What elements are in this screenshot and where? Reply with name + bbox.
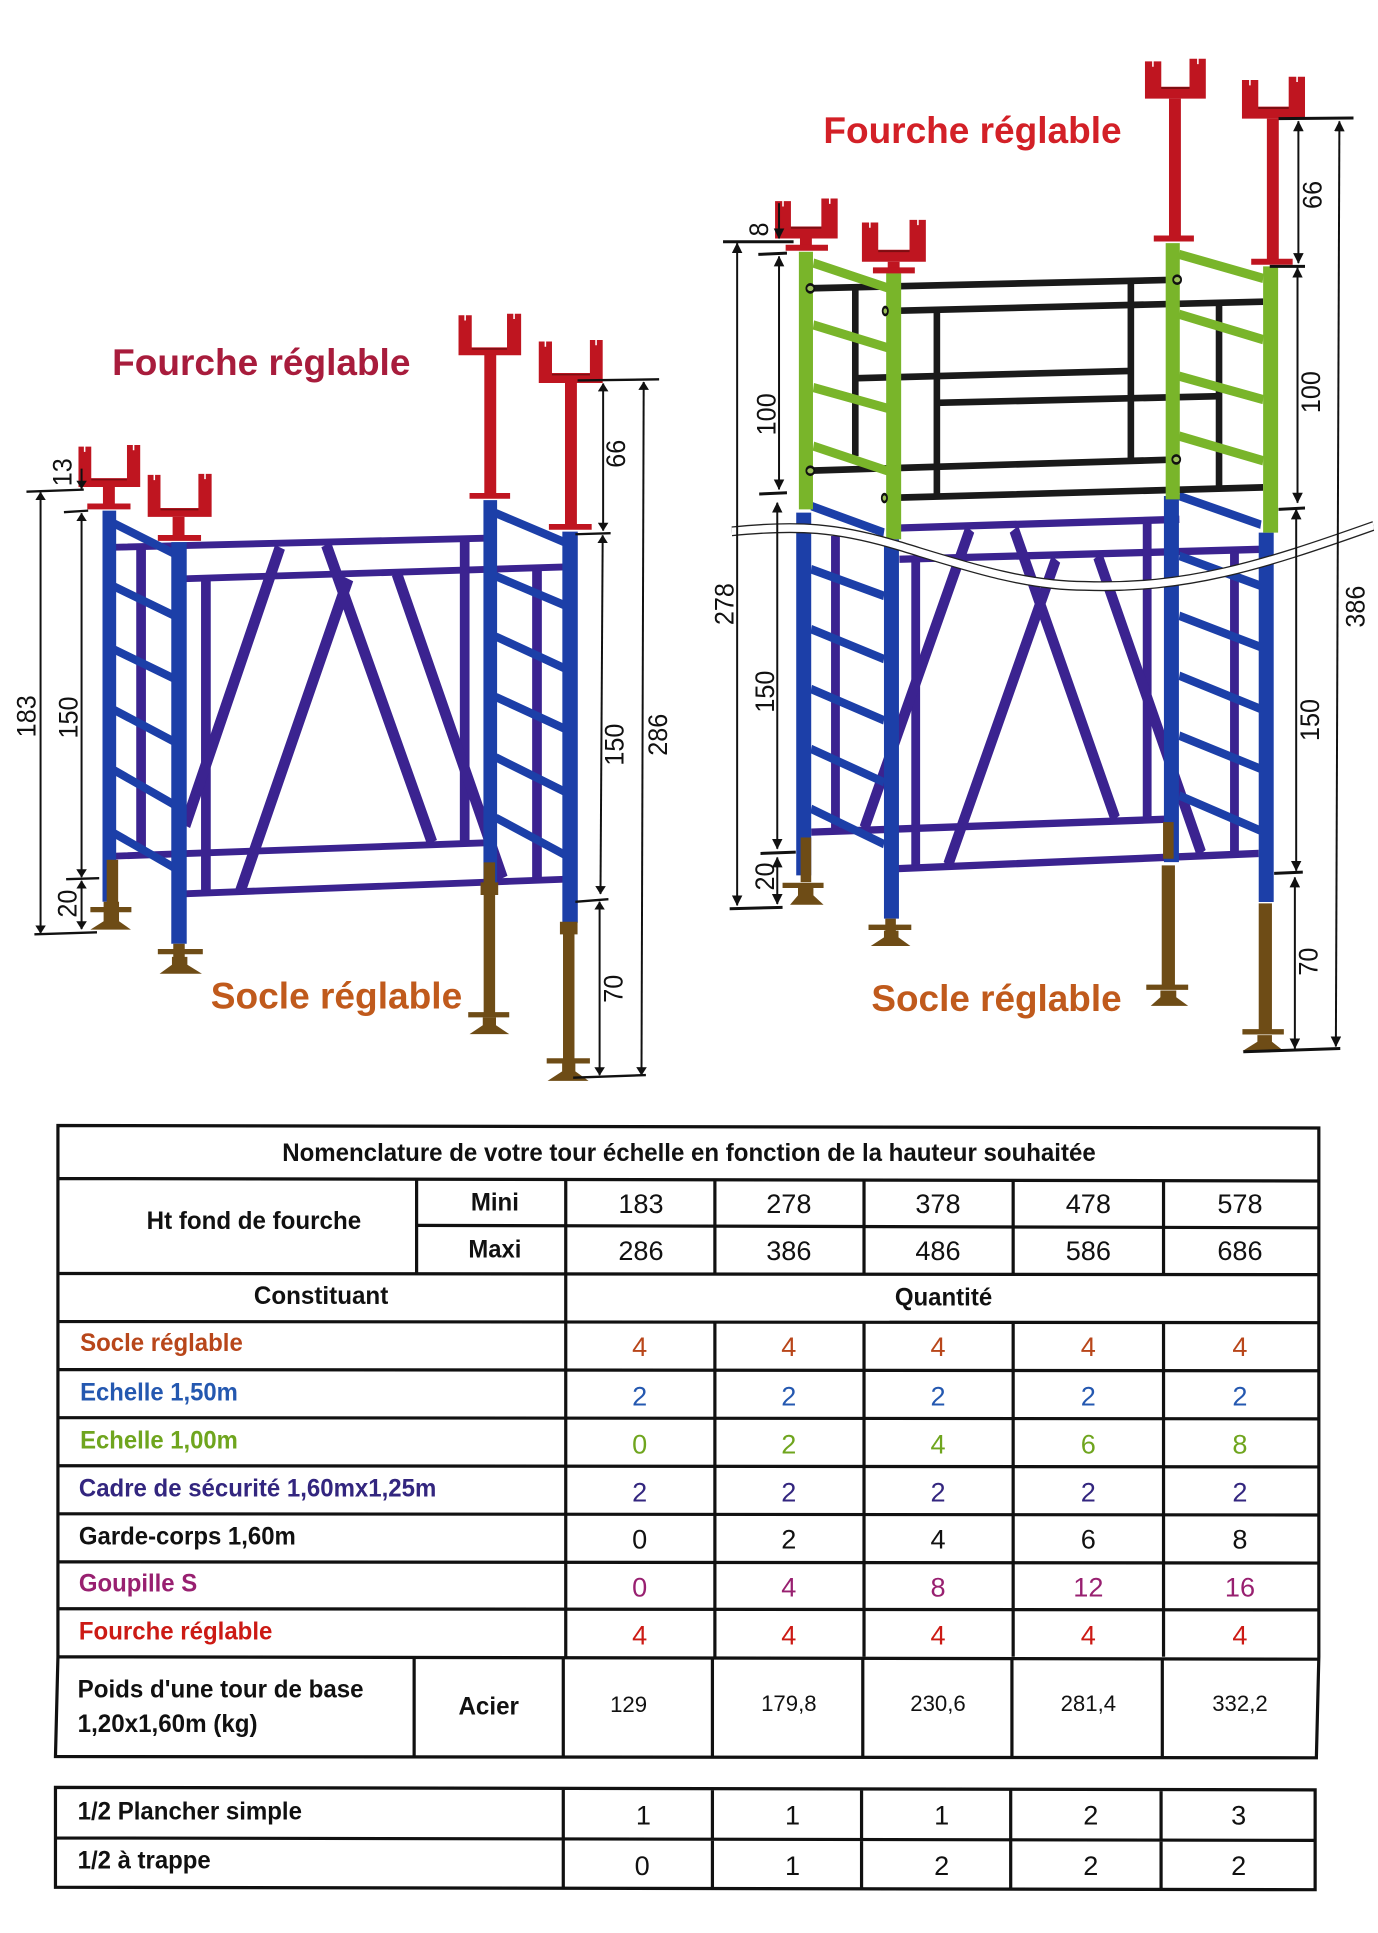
row: Socle réglable: 4 bbox=[781, 1331, 796, 1362]
row: Socle réglable bbox=[80, 1330, 1247, 1362]
row: Fourche réglable: 4 bbox=[930, 1619, 946, 1650]
dimension labels: left tower: 183 bbox=[11, 695, 42, 737]
safety frames bbox=[109, 538, 569, 894]
row: Garde-corps bbox=[79, 1523, 1247, 1554]
row: weight: 230,6 bbox=[910, 1691, 966, 1716]
row: height header: 386 bbox=[766, 1235, 811, 1266]
row: Goupille S: 4 bbox=[781, 1571, 796, 1602]
row: weight bbox=[78, 1676, 1268, 1738]
row: Garde-corps: 6 bbox=[1081, 1523, 1096, 1554]
row: height header: Ht fond de fourche bbox=[147, 1208, 361, 1235]
dimension labels: left tower: 150 bbox=[53, 696, 84, 739]
row: Cadre de sécurité bbox=[79, 1476, 1247, 1507]
dimension labels: right tower: 100 bbox=[1295, 371, 1326, 413]
row: Echelle 1,50m: Echelle 1,50m bbox=[80, 1379, 238, 1406]
dimension labels: left tower: 20 bbox=[52, 890, 83, 918]
row: height header: 486 bbox=[915, 1235, 961, 1266]
row: plancher simple: 1 bbox=[785, 1799, 800, 1830]
row: Echelle 1,50m bbox=[80, 1379, 1247, 1411]
row: Garde-corps: Garde-corps 1,60m bbox=[79, 1524, 296, 1551]
dimension labels: right tower: 8 bbox=[743, 222, 774, 236]
row: Echelle 1,00m: Echelle 1,00m bbox=[80, 1427, 238, 1454]
row: Goupille S: Goupille S bbox=[79, 1570, 197, 1597]
table grid bbox=[55, 1126, 1319, 1758]
row: Goupille S: 0 bbox=[632, 1571, 647, 1602]
upper ladders 1.00m bbox=[806, 243, 1271, 539]
row: height header: Mini bbox=[471, 1190, 519, 1217]
row: Fourche réglable: Fourche réglable bbox=[79, 1618, 272, 1645]
table: floors bbox=[55, 1787, 1315, 1890]
row: Fourche réglable: 4 bbox=[781, 1619, 796, 1650]
row: weight: 1,20x1,60m (kg) bbox=[78, 1711, 258, 1738]
dimension lines bbox=[723, 118, 1354, 1052]
row: Cadre de sécurité: 2 bbox=[781, 1476, 796, 1507]
row: column headings bbox=[254, 1283, 992, 1311]
dimension labels: right tower bbox=[709, 181, 1371, 976]
row: Socle réglable: 4 bbox=[632, 1331, 647, 1362]
row: à trappe bbox=[78, 1848, 1246, 1881]
row: Echelle 1,50m: 2 bbox=[1232, 1380, 1247, 1411]
adjustable bases bbox=[90, 860, 590, 1081]
row: Fourche réglable bbox=[79, 1618, 1247, 1650]
row: Echelle 1,00m: 2 bbox=[781, 1428, 796, 1459]
row: Cadre de sécurité: 2 bbox=[632, 1476, 647, 1507]
row: à trappe: 1 bbox=[785, 1850, 800, 1881]
table: nomenclature bbox=[55, 1126, 1319, 1758]
dimension labels: left tower: 70 bbox=[598, 975, 629, 1003]
row: weight: 332,2 bbox=[1212, 1691, 1268, 1716]
row: Cadre de sécurité: 2 bbox=[930, 1476, 946, 1507]
row: plancher simple bbox=[78, 1798, 1246, 1830]
row: plancher simple: 1/2 Plancher simple bbox=[78, 1798, 302, 1825]
dimension lines bbox=[26, 379, 659, 1078]
table title: Nomenclature de votre tour échelle en fonction de la hauteur souhaitée bbox=[282, 1140, 1096, 1167]
dimension labels: right tower: 100 bbox=[750, 393, 781, 435]
label: Socle réglable left: Socle réglable bbox=[211, 975, 462, 1016]
row: Garde-corps: 8 bbox=[1232, 1523, 1247, 1554]
row: weight: 281,4 bbox=[1061, 1691, 1116, 1716]
row: à trappe: 2 bbox=[934, 1850, 949, 1881]
row: Echelle 1,00m: 6 bbox=[1081, 1428, 1096, 1459]
row: Cadre de sécurité: Cadre de sécurité 1,60mx1,25m bbox=[79, 1476, 436, 1503]
row: Socle réglable: 4 bbox=[1081, 1331, 1096, 1362]
dimension labels: right tower: 20 bbox=[749, 862, 780, 891]
row: Echelle 1,00m bbox=[80, 1427, 1247, 1459]
row: weight: Acier bbox=[459, 1694, 519, 1721]
dimension labels: left tower bbox=[11, 440, 673, 1003]
row: Echelle 1,50m: 2 bbox=[930, 1380, 946, 1411]
row: à trappe: 1/2 à trappe bbox=[78, 1848, 211, 1875]
dimension labels: right tower: 66 bbox=[1296, 181, 1328, 209]
row: Cadre de sécurité: 2 bbox=[1081, 1476, 1096, 1507]
dimension labels: left tower: 13 bbox=[47, 458, 78, 486]
row: à trappe: 2 bbox=[1083, 1850, 1098, 1881]
row: à trappe: 0 bbox=[635, 1850, 650, 1881]
dimension labels: right tower: 150 bbox=[749, 671, 780, 713]
row: Socle réglable: 4 bbox=[930, 1331, 946, 1362]
dimension labels: right tower: 70 bbox=[1293, 948, 1324, 976]
row: weight: 129 bbox=[610, 1692, 647, 1717]
pins bbox=[806, 276, 1181, 502]
row: weight: 179,8 bbox=[761, 1691, 817, 1716]
row: Garde-corps: 0 bbox=[632, 1523, 647, 1554]
row: Fourche réglable: 4 bbox=[1232, 1619, 1247, 1650]
row: Goupille S: 16 bbox=[1225, 1571, 1255, 1602]
row: height header: 378 bbox=[915, 1188, 961, 1219]
row: Garde-corps: 2 bbox=[781, 1523, 796, 1554]
row: column headings: Constituant bbox=[254, 1283, 388, 1310]
dimension labels: left tower: 66 bbox=[600, 440, 631, 468]
row: plancher simple: 1 bbox=[934, 1799, 949, 1830]
guard rails bbox=[807, 280, 1263, 498]
row: height header: 586 bbox=[1066, 1235, 1111, 1266]
dimension labels: left tower: 150 bbox=[599, 724, 630, 766]
row: Fourche réglable: 4 bbox=[1081, 1619, 1096, 1650]
diagram: left tower bbox=[26, 313, 659, 1081]
row: height header: Maxi bbox=[468, 1236, 521, 1263]
lower ladders 1.50m bbox=[804, 496, 1266, 919]
row: Goupille S bbox=[79, 1570, 1255, 1602]
dimension labels: left tower: 286 bbox=[642, 714, 673, 756]
row: Echelle 1,00m: 0 bbox=[632, 1428, 647, 1459]
row: height header: 286 bbox=[618, 1235, 664, 1266]
row: Echelle 1,00m: 4 bbox=[930, 1428, 946, 1459]
row: height header: 478 bbox=[1066, 1188, 1111, 1219]
label: Socle réglable right: Socle réglable bbox=[871, 978, 1122, 1019]
row: Echelle 1,50m: 2 bbox=[632, 1380, 647, 1411]
lower safety frames bbox=[811, 519, 1261, 869]
row: Goupille S: 12 bbox=[1073, 1571, 1103, 1602]
break line bbox=[732, 526, 1373, 586]
diagram: right tower bbox=[723, 57, 1373, 1052]
row: height header: 578 bbox=[1217, 1188, 1263, 1219]
row: height header bbox=[147, 1188, 1263, 1266]
dimension labels: right tower: 386 bbox=[1340, 586, 1371, 628]
row: height header: 278 bbox=[766, 1188, 811, 1219]
row: Socle réglable: 4 bbox=[1232, 1331, 1247, 1362]
row: Echelle 1,00m: 8 bbox=[1232, 1428, 1247, 1459]
floors grid bbox=[55, 1787, 1315, 1890]
adjustable forks bbox=[78, 313, 603, 539]
dimension labels: right tower: 150 bbox=[1294, 699, 1325, 741]
adjustable bases bbox=[783, 822, 1284, 1051]
dimension labels: right tower: 278 bbox=[709, 583, 740, 625]
row: plancher simple: 1 bbox=[636, 1799, 651, 1830]
row: Echelle 1,50m: 2 bbox=[1081, 1380, 1096, 1411]
label: Fourche réglable left: Fourche réglable bbox=[112, 342, 410, 383]
row: height header: 686 bbox=[1217, 1235, 1263, 1266]
row: plancher simple: 2 bbox=[1083, 1799, 1098, 1830]
row: Garde-corps: 4 bbox=[930, 1523, 946, 1554]
row: Goupille S: 8 bbox=[930, 1571, 946, 1602]
row: column headings: Quantité bbox=[895, 1284, 992, 1311]
row: Echelle 1,50m: 2 bbox=[781, 1380, 796, 1411]
ladders 1.50m bbox=[109, 500, 570, 944]
row: Fourche réglable: 4 bbox=[632, 1619, 647, 1650]
label: Fourche réglable right: Fourche réglable bbox=[823, 110, 1122, 151]
row: Socle réglable: Socle réglable bbox=[80, 1330, 243, 1357]
row: weight: Poids d'une tour de base bbox=[78, 1676, 364, 1703]
row: à trappe: 2 bbox=[1231, 1850, 1246, 1881]
row: plancher simple: 3 bbox=[1231, 1799, 1246, 1830]
row: Cadre de sécurité: 2 bbox=[1232, 1476, 1247, 1507]
adjustable forks bbox=[775, 57, 1305, 273]
row: height header: 183 bbox=[618, 1188, 664, 1219]
